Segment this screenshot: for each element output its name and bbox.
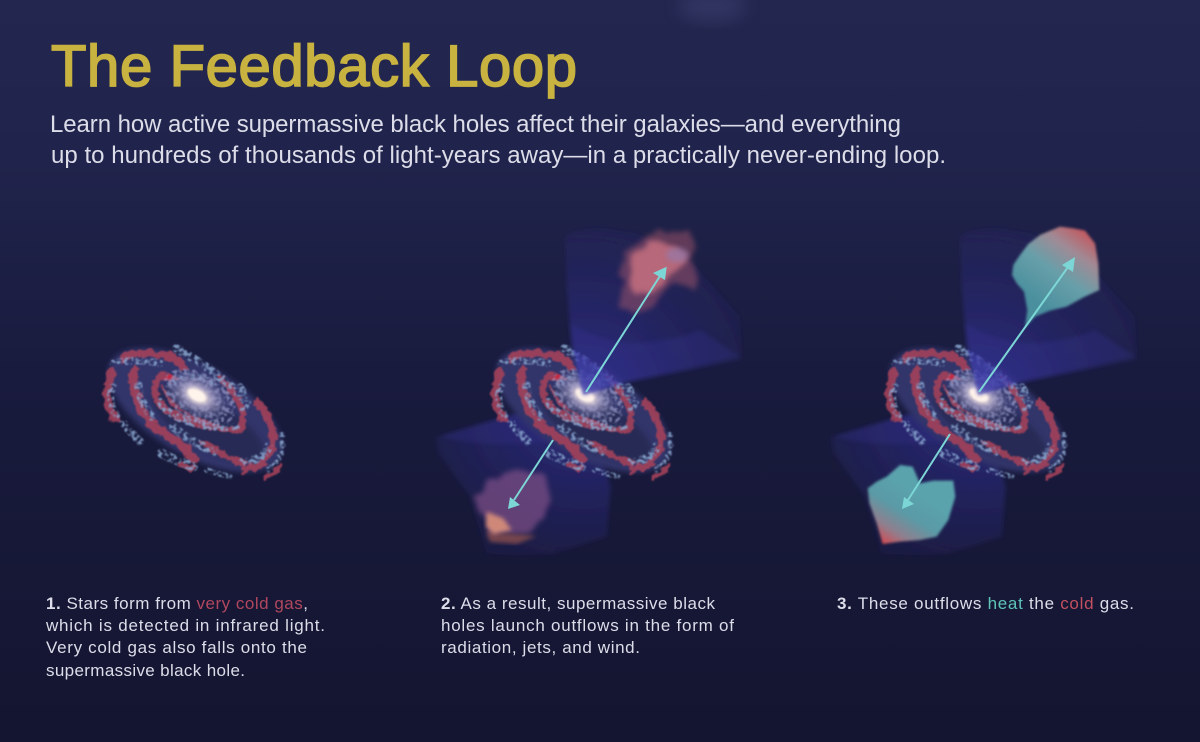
caption 2: 2. As a result, supermassive black [441,594,716,613]
intro text: up to hundreds of thousands of light-years away—in a practically never-ending loop. [51,142,946,169]
faint nebula smudge at top [678,0,746,22]
upper outflow cone [960,228,1137,395]
caption 1 [45,594,325,680]
pink gas clouds [473,230,700,544]
caption 2: holes launch outflows in the form of [441,616,734,635]
caption 1: which is detected in infrared light. [45,616,325,635]
caption 1: 1. Stars form from very cold gas, [46,594,308,613]
arrow: outflow down [902,434,950,509]
galaxy [871,323,1083,497]
panel 3: galaxy with heated gas [831,227,1137,555]
arrow: outflow down [508,440,553,509]
panel 1: galaxy [89,323,301,497]
title: The Feedback Loop [51,34,577,99]
panel 2: galaxy with outflows [436,228,742,555]
arrow: outflow up [979,257,1075,392]
caption 1: supermassive black hole. [46,661,245,680]
caption 2 [441,594,734,657]
caption 1: Very cold gas also falls onto the [46,638,307,657]
caption 3: 3. These outflows heat the cold gas. [837,594,1134,613]
intro text: Learn how active supermassive black holes affect their galaxies—and everything [50,111,901,138]
upper outflow cone [565,228,742,395]
caption 2: radiation, jets, and wind. [441,638,640,657]
arrow: outflow up [586,267,667,392]
galaxy [477,323,689,497]
heated gas clouds [868,227,1099,544]
lower outflow cone [831,395,1006,555]
intro text [50,111,946,169]
lower outflow cone [436,395,611,555]
